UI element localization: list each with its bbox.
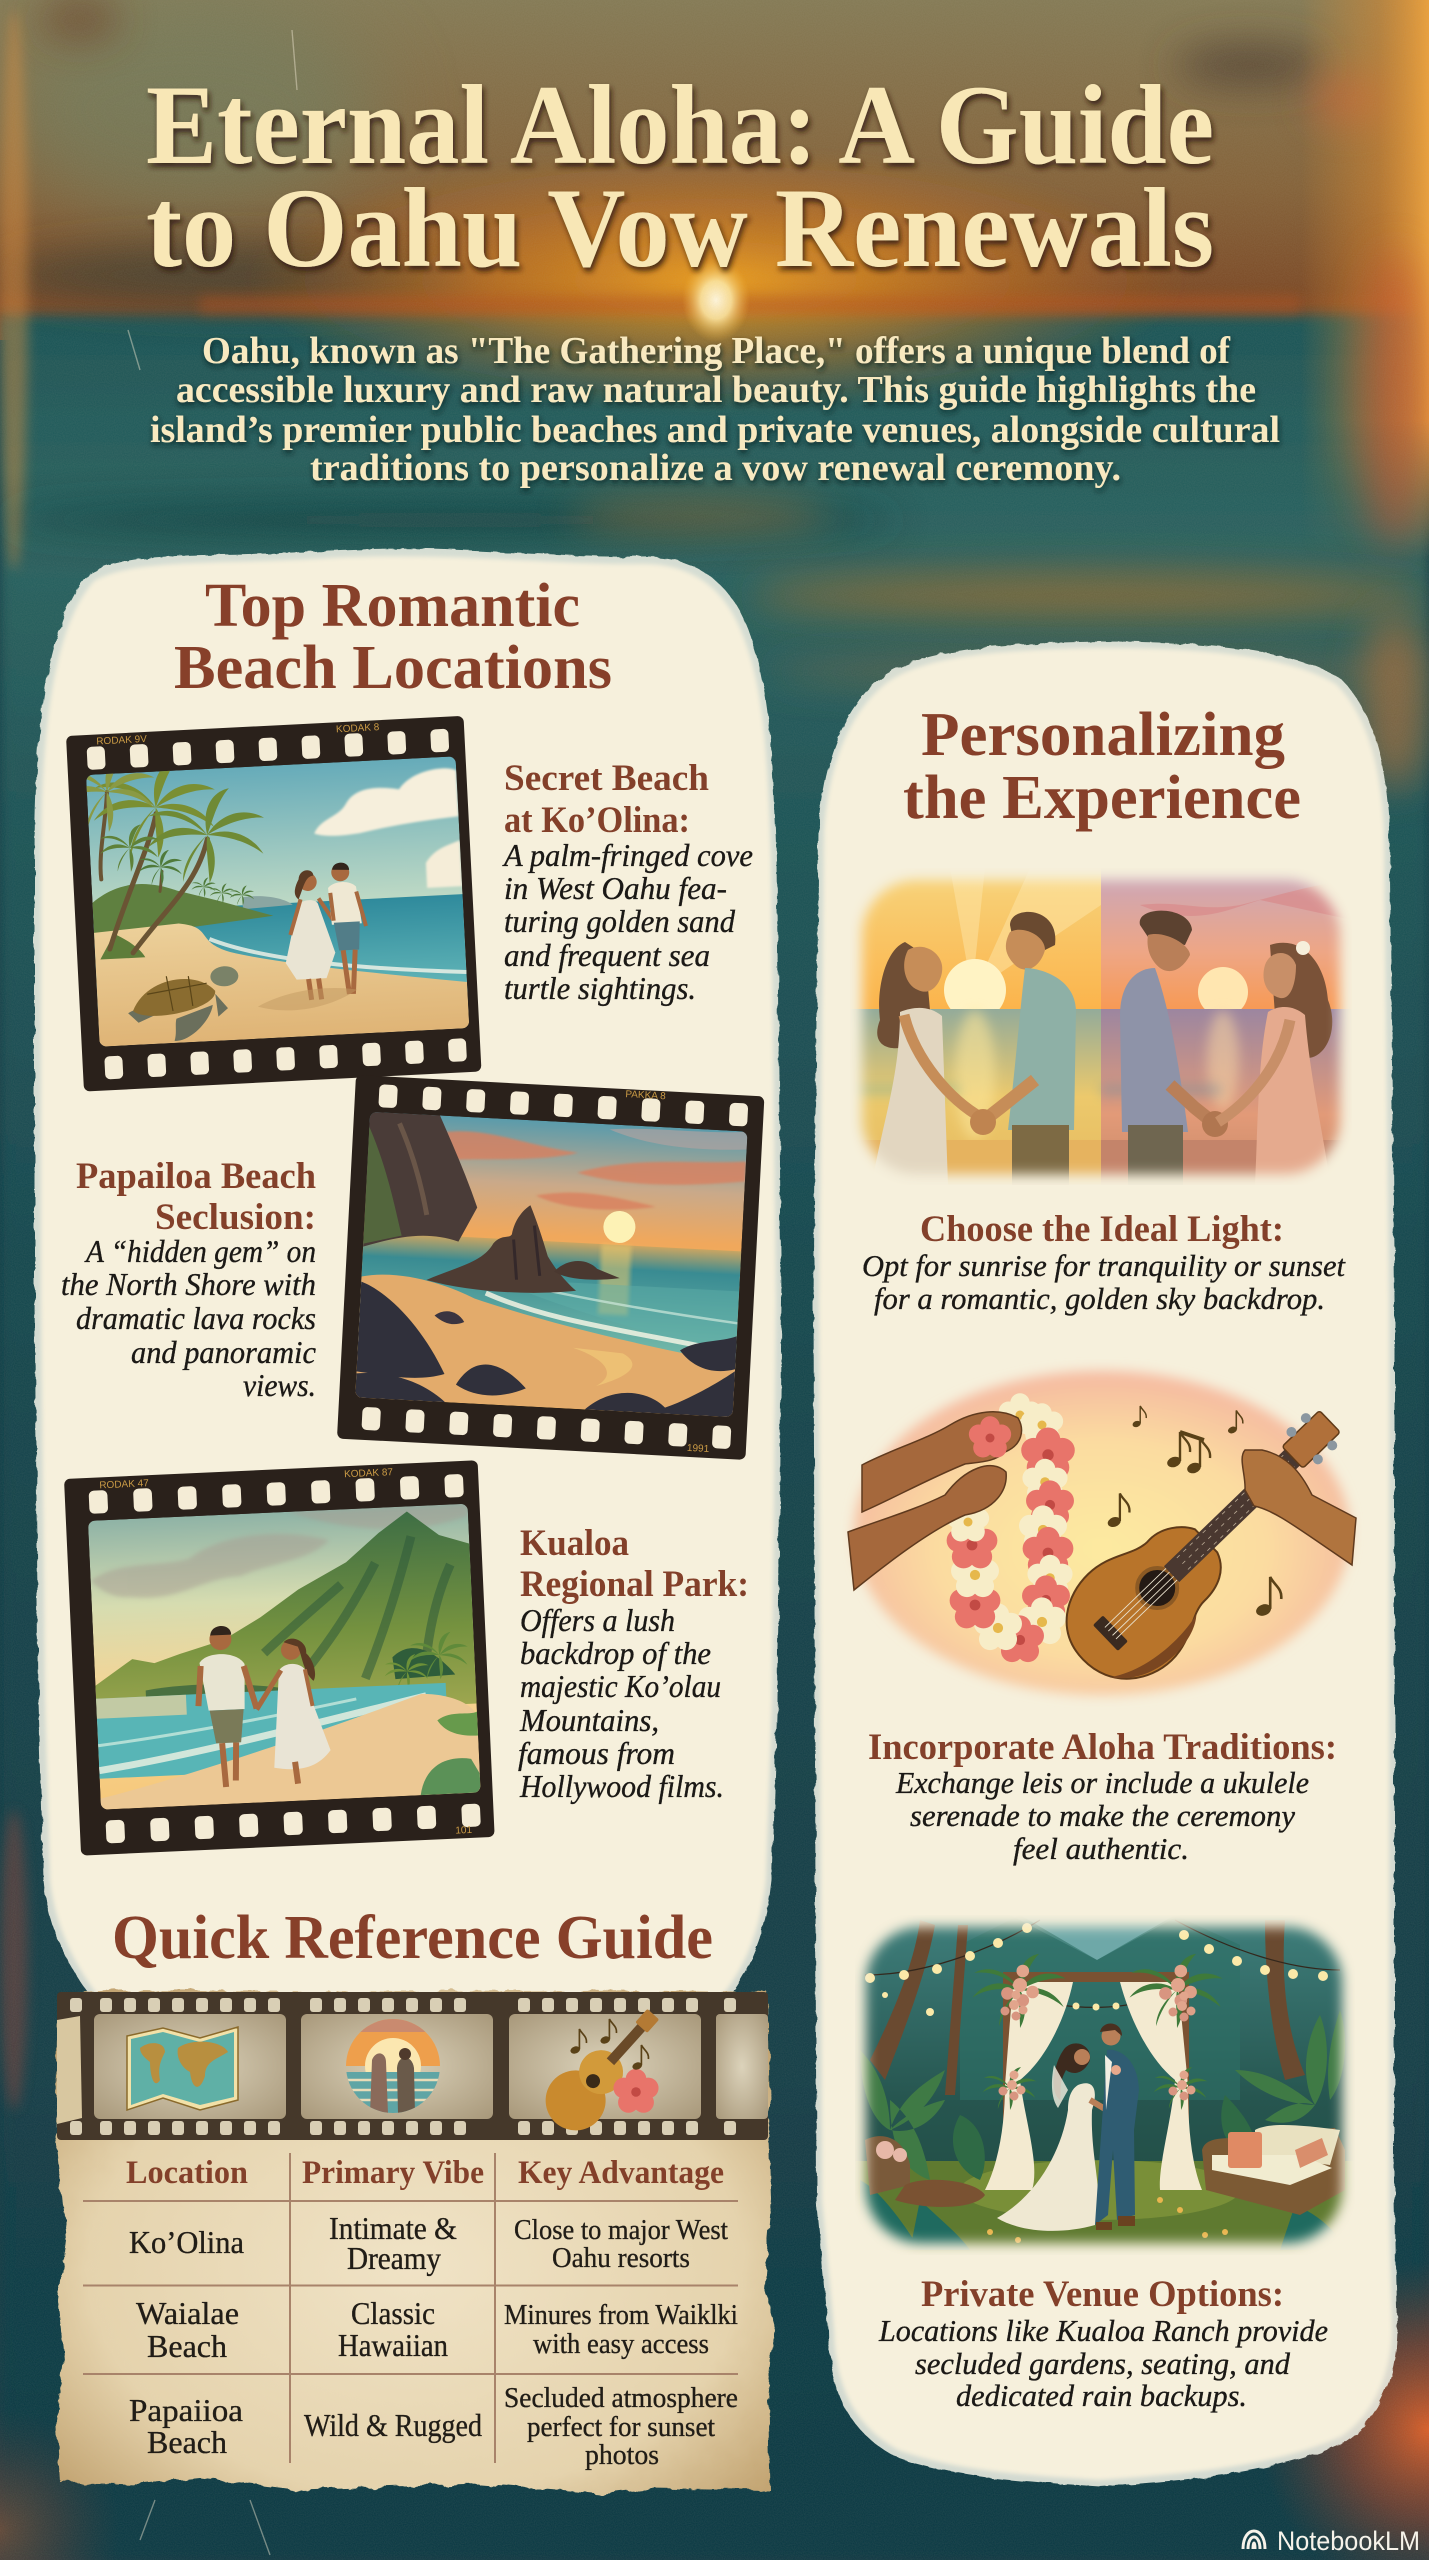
music notes: [1106, 1406, 1281, 1618]
notebooklm watermark: NotebookLM: [1277, 2526, 1420, 2556]
icon: ukulele, notes and hibiscus: [533, 1994, 676, 2143]
table row: Papaiioa Beach: perfect for sunset: [527, 2411, 715, 2443]
caption: Kualoa Regional Park: Kualoa: [520, 1523, 629, 1564]
table header row: [126, 2155, 724, 2191]
caption: Secret Beach at Ko'Olina: turing golden sand: [504, 903, 736, 939]
caption: Kualoa Regional Park: Mountains,: [519, 1702, 659, 1738]
caption: Papailoa Beach Seclusion: dramatic lava rocks: [76, 1300, 316, 1336]
panel: personalizing the experience: [815, 643, 1396, 2485]
film frame: Kualoa Regional Park photo: 101: [455, 1825, 473, 1837]
caption: Secret Beach at Ko'Olina: at Ko’Olina:: [504, 800, 690, 841]
title: Eternal Aloha: A Guide: [146, 63, 1214, 188]
title: [146, 63, 1214, 291]
table row: Waialae Beach: with easy access: [533, 2328, 709, 2360]
intro paragraph: island’s premier public beaches and private venues, alongside cultural: [150, 409, 1280, 451]
table row: Ko'Olina: Oahu resorts: [552, 2242, 690, 2274]
film frame: Papailoa Beach photo: [337, 1075, 764, 1460]
table row: Waialae Beach: Classic: [351, 2295, 435, 2331]
caption: Papailoa Beach Seclusion: views.: [243, 1367, 316, 1403]
text: private venue options: [878, 2274, 1328, 2413]
heading: top romantic beach locations: [174, 572, 612, 702]
caption: Kualoa Regional Park: [518, 1523, 749, 1804]
text: incorporate aloha traditions: feel authentic.: [1013, 1831, 1189, 1866]
table row: Waialae Beach: Minures from Waiklki: [504, 2299, 738, 2331]
text: choose the ideal light: for a romantic, golden sky backdrop.: [874, 1281, 1325, 1316]
table grid: [83, 2153, 738, 2463]
film frame: Secret Beach photo: RODAK 9V: [96, 734, 147, 747]
film frame: Kualoa Regional Park photo: KODAK 87: [344, 1467, 394, 1480]
table row: Ko'Olina: Intimate &: [329, 2210, 457, 2246]
text: incorporate aloha traditions: serenade to make the ceremony: [910, 1798, 1295, 1833]
text: incorporate aloha traditions: Exchange leis or include a ukulele: [895, 1765, 1309, 1800]
table row: Ko'Olina: Ko’Olina: [129, 2224, 244, 2260]
panel: top romantic beach locations: [36, 550, 780, 2005]
caption: Papailoa Beach Seclusion: Papailoa Beach: [76, 1156, 316, 1197]
table row: Waialae Beach: Hawaiian: [338, 2327, 448, 2363]
heading: personalizing the experience: [903, 701, 1301, 832]
heading: top romantic beach locations: Beach Locations: [174, 634, 612, 702]
table row: Papaiioa Beach: Beach: [147, 2424, 227, 2460]
text: incorporate aloha traditions: [868, 1727, 1337, 1866]
caption: Kualoa Regional Park: Hollywood films.: [519, 1768, 724, 1804]
table row: Papaiioa Beach: Wild & Rugged: [304, 2407, 482, 2443]
panel: quick reference guide parchment: [56, 1990, 775, 2494]
caption: Secret Beach at Ko'Olina: in West Oahu fea-: [504, 870, 727, 906]
caption: Kualoa Regional Park: Regional Park:: [520, 1564, 749, 1605]
text: incorporate aloha traditions: Incorporate Aloha Traditions:: [868, 1727, 1337, 1768]
intro paragraph: [150, 330, 1280, 489]
caption: Kualoa Regional Park: backdrop of the: [520, 1635, 711, 1671]
film frame: Kualoa Regional Park photo: RODAK 47: [99, 1478, 149, 1491]
text: private venue options: Locations like Kualoa Ranch provide: [878, 2313, 1328, 2348]
film frame: Papailoa Beach photo: 1991: [687, 1443, 710, 1455]
text: private venue options: Private Venue Options:: [921, 2274, 1284, 2315]
arms holding the lei: [848, 1412, 1022, 1590]
caption: Secret Beach at Ko'Olina: and frequent sea: [504, 937, 710, 973]
table row: Ko'Olina: Dreamy: [347, 2240, 441, 2276]
caption: Secret Beach at Ko'Olina: A palm-fringed cove: [502, 837, 753, 873]
icon: world map: [127, 2027, 238, 2110]
lei garland: [947, 1393, 1075, 1662]
caption: Papailoa Beach Seclusion: the North Shore with: [61, 1266, 316, 1302]
table row: Papaiioa Beach: photos: [585, 2439, 659, 2471]
caption: Papailoa Beach Seclusion: and panoramic: [131, 1334, 316, 1370]
table row: Papaiioa Beach: [129, 2382, 738, 2471]
film strip with icons: [57, 1992, 768, 2140]
film frame: Secret Beach photo: [54, 716, 482, 1092]
text: choose the ideal light: Choose the Ideal Light:: [920, 1209, 1284, 1250]
caption: Papailoa Beach Seclusion: Seclusion:: [155, 1197, 316, 1238]
table row: Ko'Olina: Close to major West: [514, 2214, 728, 2246]
film frame: Papailoa Beach photo: PAKKA 8: [625, 1089, 666, 1102]
text: private venue options: dedicated rain backups.: [956, 2378, 1247, 2413]
illustration: lei and ukulele: [848, 1371, 1373, 1704]
title: to Oahu Vow Renewals: [146, 166, 1214, 291]
caption: Secret Beach at Ko'Olina: turtle sightings.: [504, 970, 696, 1006]
text: private venue options: secluded gardens, seating, and: [915, 2346, 1290, 2381]
text: choose the ideal light: Opt for sunrise for tranquility or sunset: [862, 1248, 1346, 1283]
table row: Waialae Beach: [136, 2295, 738, 2364]
caption: Kualoa Regional Park: majestic Ko’olau: [520, 1668, 721, 1704]
intro paragraph: accessible luxury and raw natural beauty. This guide highlights the: [176, 369, 1256, 411]
ukulele and hand: [1043, 1380, 1373, 1704]
film frame: Kualoa Regional Park photo: [64, 1460, 495, 1856]
heading: personalizing the experience: the Experience: [903, 764, 1301, 832]
illustration: sunrise and sunset couples: [850, 868, 1352, 1185]
caption: Secret Beach at Ko'Olina: Secret Beach: [504, 758, 709, 799]
heading: quick reference guide: Quick Reference Guide: [112, 1904, 713, 1972]
table header row: Key Advantage: [518, 2155, 724, 2191]
table row: Waialae Beach: Waialae: [136, 2295, 239, 2331]
table row: Papaiioa Beach: Secluded atmosphere: [504, 2382, 738, 2414]
caption: Kualoa Regional Park: famous from: [518, 1735, 675, 1771]
caption: Papailoa Beach Seclusion: A “hidden gem” on: [84, 1233, 316, 1269]
table row: Ko'Olina: [129, 2210, 728, 2276]
table row: Papaiioa Beach: Papaiioa: [129, 2392, 243, 2428]
intro paragraph: Oahu, known as "The Gathering Place," offers a unique blend of: [202, 330, 1231, 372]
icon: couple at sunset: [345, 2018, 441, 2116]
table row: Waialae Beach: Beach: [147, 2328, 227, 2364]
film frame: Secret Beach photo: KODAK 8: [336, 722, 380, 735]
text: choose the ideal light: [862, 1209, 1346, 1316]
intro paragraph: traditions to personalize a vow renewal ceremony.: [310, 447, 1121, 489]
heading: personalizing the experience: Personalizing: [921, 701, 1285, 769]
caption: Kualoa Regional Park: Offers a lush: [520, 1602, 675, 1638]
caption: Secret Beach at Ko'Olina: [502, 758, 753, 1006]
heading: top romantic beach locations: Top Romantic: [205, 572, 580, 640]
caption: Papailoa Beach Seclusion: [61, 1156, 316, 1403]
illustration: private garden venue: [855, 1915, 1355, 2255]
table header row: Location: [126, 2155, 248, 2191]
table header row: Primary Vibe: [302, 2155, 484, 2191]
